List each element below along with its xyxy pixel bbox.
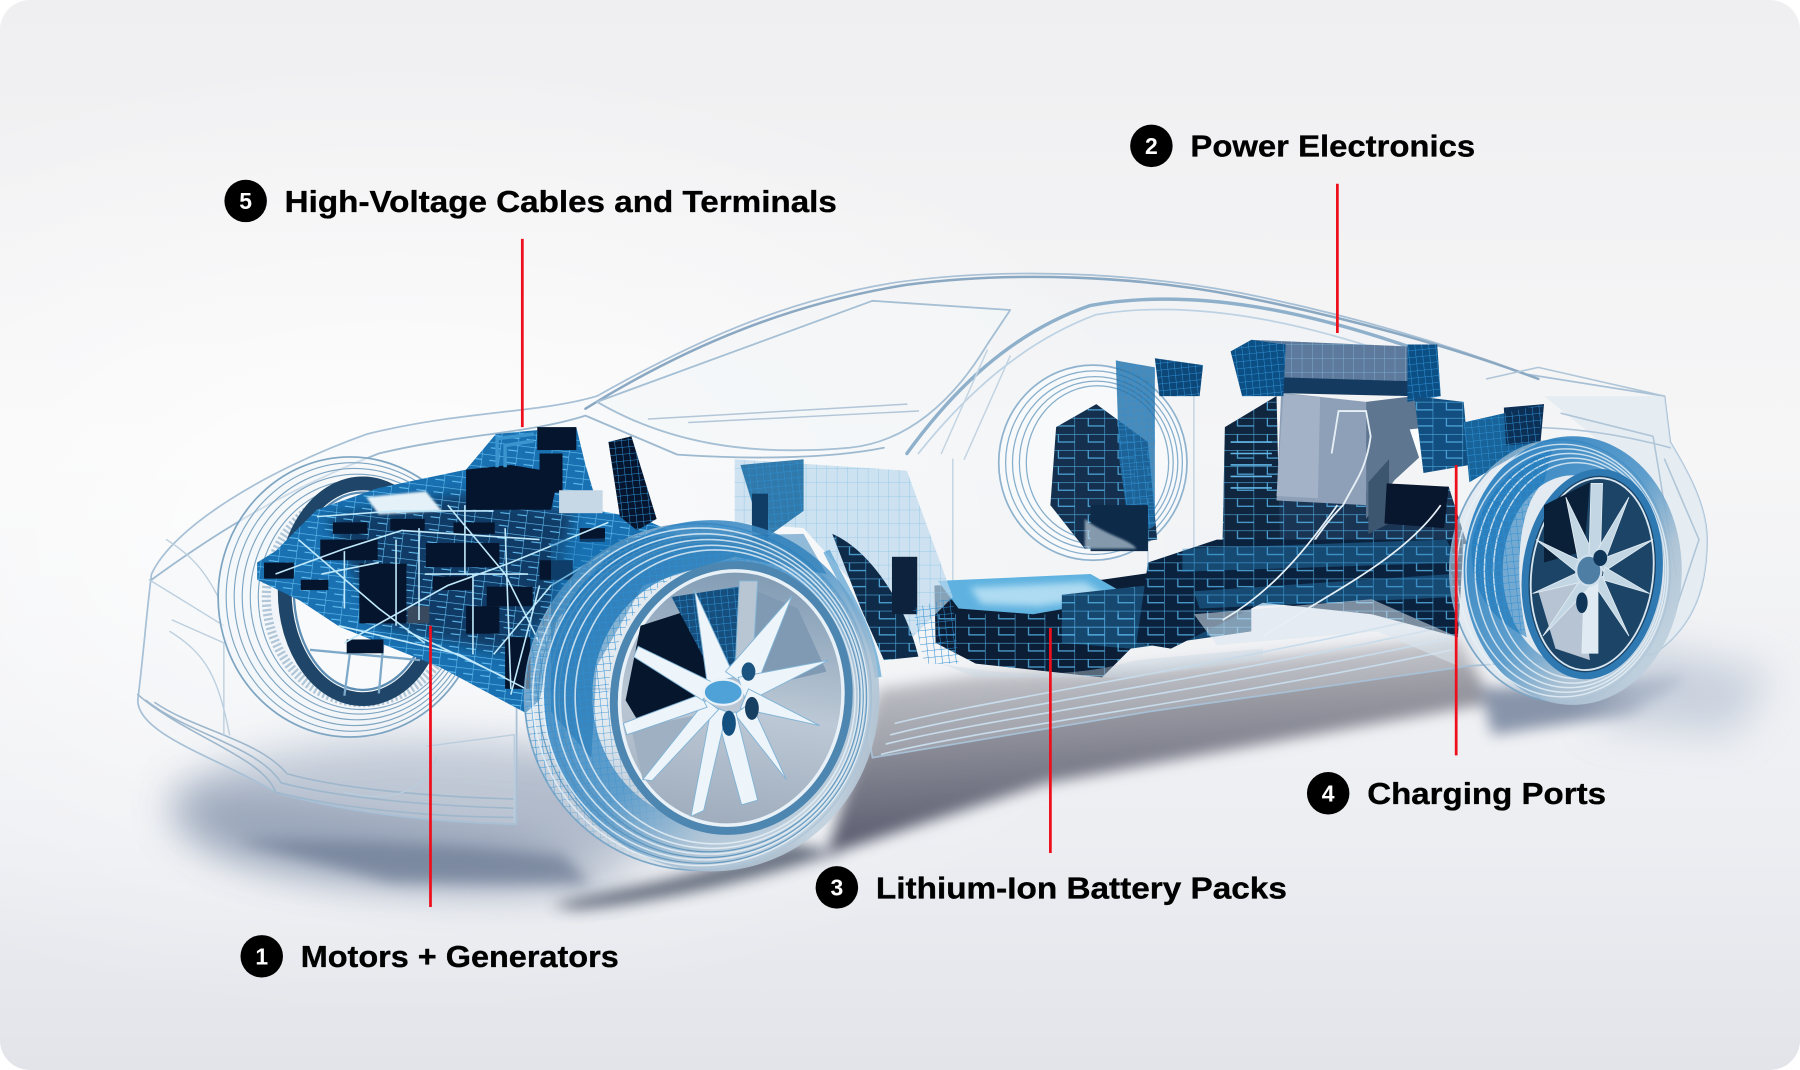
label 3: Lithium-Ion Battery Packs: Lithium-Ion Battery Packs xyxy=(876,871,1287,905)
label 5: High-Voltage Cables and Terminals: 5 xyxy=(239,188,252,214)
label 2: Power Electronics: 2 xyxy=(1145,133,1158,159)
front far wheel xyxy=(218,457,482,737)
label 3: Lithium-Ion Battery Packs: 3 xyxy=(830,874,843,900)
dark cells xyxy=(264,427,657,689)
machinery: mid structure xyxy=(735,459,959,677)
car body shell xyxy=(138,274,1707,824)
leader line: power electronics xyxy=(1336,184,1339,333)
machinery: power electronics, rear xyxy=(1155,340,1544,608)
leader line: motors and generators xyxy=(429,626,432,907)
leader line: charging ports xyxy=(1455,465,1457,755)
label 1: Motors + Generators: Motors + Generators xyxy=(301,940,619,974)
label 4: Charging Ports xyxy=(1307,772,1606,815)
label 3: Lithium-Ion Battery Packs xyxy=(816,866,1287,909)
machinery: motors and generators, front xyxy=(257,427,677,713)
label 4: Charging Ports: 4 xyxy=(1322,780,1335,806)
motor cylinder xyxy=(1231,340,1441,402)
rear wheel spokes xyxy=(1533,483,1653,653)
wheel spokes xyxy=(623,581,829,816)
leader line: high-voltage cables xyxy=(521,239,524,427)
rear far wheel xyxy=(999,361,1187,560)
front near wheel xyxy=(525,524,871,870)
label 2: Power Electronics: Power Electronics xyxy=(1190,130,1475,164)
machinery: battery floor and rear subframe xyxy=(934,505,1464,677)
label 5: High-Voltage Cables and Terminals xyxy=(224,180,837,222)
rear near wheel xyxy=(1450,440,1671,701)
leader line: lithium-ion battery xyxy=(1049,628,1052,853)
label 1: Motors + Generators: 1 xyxy=(255,943,268,969)
label 2: Power Electronics xyxy=(1130,125,1475,167)
ground shadows xyxy=(172,637,1774,909)
label 5: High-Voltage Cables and Terminals: High-Voltage Cables and Terminals xyxy=(285,185,837,219)
label 1: Motors + Generators xyxy=(240,935,619,978)
label 4: Charging Ports: Charging Ports xyxy=(1367,777,1606,811)
